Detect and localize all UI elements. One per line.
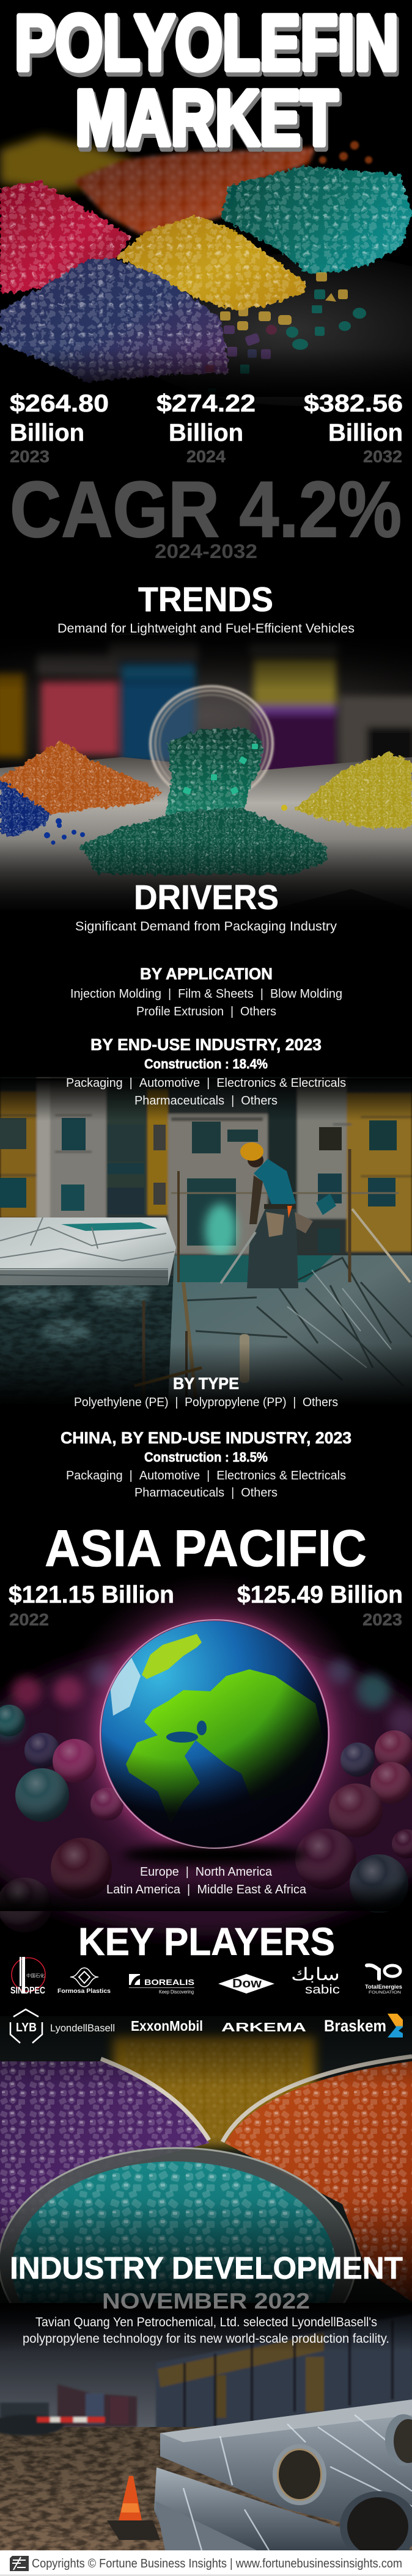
- segment: by end-use industry: Packaging | Automotive | Electronics & Electricals: [66, 1076, 346, 1090]
- worker head: [248, 1153, 263, 1167]
- segment: by end-use industry: BY END-USE INDUSTRY, 2023: [90, 1036, 322, 1054]
- lower roll end tube: [340, 2491, 412, 2562]
- stat: 2023 value: $264.80: [10, 390, 109, 417]
- pale post: [240, 1334, 249, 1383]
- Asia Pacific heading and values: [9, 1520, 403, 1629]
- worker trousers: [247, 1206, 298, 1288]
- blurred background: [0, 635, 412, 769]
- stray yellow pellet: [281, 805, 287, 811]
- logo: Braskem: Braskem: [324, 2017, 386, 2035]
- image fades: [0, 635, 412, 690]
- logo: Sinopec: 中国石化: [26, 1973, 45, 1978]
- segment: by application: BY APPLICATION: [140, 965, 273, 983]
- yellow bowl pellets: [125, 2042, 303, 2143]
- glass jar: [150, 686, 273, 801]
- broom handle: [221, 1232, 256, 1283]
- logo: Sabic: سابك: [291, 1964, 340, 1984]
- Night side: [98, 1618, 330, 1850]
- ground ruts: [0, 2427, 412, 2552]
- hanging bucket: [316, 1194, 336, 1215]
- trends heading: TRENDS: [138, 580, 273, 619]
- windows: [0, 1118, 397, 1253]
- segment: by end-use industry: Pharmaceuticals | Others: [134, 1094, 278, 1108]
- logo: LyondellBasell: LYB: [16, 2021, 37, 2034]
- tarp on the right: [168, 1255, 412, 1404]
- yellow pile: [294, 752, 412, 828]
- blurred spheres: [0, 1660, 412, 1740]
- lower wall: [0, 1276, 177, 1404]
- Asia Pacific heading and values: ASIA PACIFIC: [45, 1520, 367, 1578]
- stat: 2032 value: $382.56: [304, 390, 403, 417]
- teal bowl: [0, 2148, 356, 2376]
- Eurasia and Africa: [126, 1669, 324, 1824]
- distant buildings: [0, 2384, 137, 2427]
- Asia Pacific heading and values: 2022: [9, 1610, 49, 1629]
- industry development heading: INDUSTRY DEVELOPMENT: [10, 2251, 403, 2285]
- shadow under globe: [123, 1844, 306, 1866]
- dark mound: [0, 2415, 64, 2436]
- drivers heading: [75, 878, 337, 934]
- fade at the top: [0, 2016, 412, 2088]
- Asia Pacific heading and values: 2023: [362, 1610, 402, 1629]
- logo: Sinopec: SINOPEC: [10, 1986, 45, 1996]
- worker shirt: [254, 1159, 296, 1209]
- top and bottom fades: [0, 1881, 412, 1911]
- stat: 2032 value: 2032: [363, 447, 402, 466]
- bottom darkening: [0, 348, 412, 397]
- title: [15, 0, 400, 165]
- northern landmass: [142, 1634, 202, 1679]
- steam: [205, 1203, 237, 1257]
- focused spheres: [0, 1705, 412, 1932]
- stat: 2032 value: [304, 390, 403, 466]
- tarp folds: [183, 1258, 412, 1386]
- segment: by application: [70, 965, 342, 1018]
- green heap on table: [79, 807, 328, 874]
- lighter tarp highlights: [287, 1270, 391, 1368]
- tool belt: [264, 1204, 313, 1237]
- logo: LyondellBasell: [10, 2009, 115, 2043]
- title: MARKET: [77, 78, 340, 165]
- wall stains: [0, 1276, 177, 1404]
- rolls wrapped in plastic: [154, 2400, 412, 2562]
- industry development text: [23, 2315, 389, 2346]
- Asia Pacific heading and values: $121.15 Billion: [9, 1581, 174, 1608]
- ocean: [98, 1618, 330, 1850]
- scattered pellets: [183, 272, 366, 394]
- footer logo: [10, 2556, 29, 2571]
- bright green pellets: [183, 744, 258, 795]
- top fade: [0, 2303, 412, 2352]
- drivers heading: Significant Demand from Packaging Industry: [75, 920, 337, 934]
- Inland seas: [166, 1721, 207, 1743]
- trends heading: [57, 580, 355, 636]
- scaffolding: [134, 1149, 410, 1398]
- black band under the trends image: [0, 910, 412, 1078]
- orange pile: [0, 741, 163, 815]
- footer: [0, 2550, 412, 2576]
- wall patches: [0, 1281, 153, 1343]
- logo: Sabic: sabic: [305, 1983, 340, 1997]
- segment: by application: Injection Molding | Film & Sheets | Blow Molding: [70, 987, 342, 1001]
- key players heading: KEY PLAYERS: [78, 1920, 335, 1964]
- segment: China by end-use industry: CHINA, BY END-USE INDUSTRY, 2023: [61, 1429, 351, 1447]
- logo: Dow: [218, 1974, 274, 1994]
- worker helmet: [240, 1142, 263, 1161]
- industry development heading: [10, 2251, 403, 2313]
- blurred far yellow pile: [0, 136, 131, 190]
- segment: by application: Profile Extrusion | Others: [136, 1005, 276, 1018]
- drivers heading: DRIVERS: [134, 878, 279, 917]
- lower roll: [154, 2467, 412, 2550]
- segment: by type: BY TYPE: [173, 1374, 239, 1393]
- segment: by end-use industry: Construction : 18.4%: [144, 1056, 268, 1072]
- industry development text: Tavian Quang Yen Petrochemical, Ltd. selected LyondellBasell's: [35, 2315, 377, 2329]
- segment: by type: Polyethylene (PE) | Polypropylene (PP) | Others: [74, 1396, 338, 1409]
- yellow pile: [116, 216, 306, 311]
- CAGR figure: 2024-2032: [155, 540, 257, 562]
- stat: 2023 value: [10, 390, 109, 466]
- logo: Arkema: ARKEMA: [221, 2021, 306, 2034]
- stat: 2024 value: 2024: [186, 447, 226, 466]
- purple bowl: [0, 2059, 209, 2253]
- blurred jars: [0, 639, 412, 776]
- Asia Pacific heading and values: $125.49 Billion: [237, 1581, 403, 1608]
- logo: TotalEnergies Foundation: FOUNDATION: [369, 1991, 401, 1995]
- ground: [0, 2427, 412, 2552]
- industry development heading: NOVEMBER 2022: [102, 2288, 310, 2313]
- stat: 2024 value: [156, 390, 256, 466]
- globe scene with spheres: [0, 1572, 412, 1936]
- roll end tube: [273, 2444, 326, 2505]
- logo: Braskem: [324, 2014, 403, 2037]
- logo: Dow: Dow: [232, 1977, 262, 1990]
- wrap highlights: [183, 2415, 412, 2550]
- purple backdrop: [0, 1642, 412, 1936]
- stat: 2024 value: $274.22: [156, 390, 256, 417]
- worker: [221, 1142, 336, 1288]
- segment: China by end-use industry: Construction : 18.5%: [144, 1449, 268, 1465]
- title: MARKET: [75, 74, 338, 162]
- other regions: [106, 1865, 307, 1896]
- blue pile: [0, 779, 51, 836]
- logo: Formosa Plastics: [57, 1968, 111, 1995]
- blurred distant pellets: [319, 141, 372, 164]
- dark fade behind heading: [0, 2198, 412, 2303]
- building facade: [0, 1078, 412, 1286]
- table: [0, 757, 412, 910]
- logo: LyondellBasell: LyondellBasell: [50, 2022, 115, 2034]
- right roll end tube: [385, 2414, 412, 2465]
- upper roll: [160, 2400, 412, 2540]
- other regions: Latin America | Middle East & Africa: [106, 1883, 307, 1896]
- construction site image with plastic rolls: [0, 2303, 412, 2562]
- red pile: [0, 181, 131, 294]
- logo: Sinopec: [10, 1957, 45, 1996]
- segment: China by end-use industry: [61, 1429, 351, 1500]
- trends image: jars and pellets: [0, 635, 412, 910]
- stat: 2023 value: 2023: [10, 447, 50, 466]
- logo: Borealis: Keep Discovering: [159, 1989, 194, 1995]
- purple and blue pile: [0, 259, 229, 382]
- stat: 2024 value: Billion: [169, 419, 243, 446]
- hero image: coloured polymer pellet piles: [0, 136, 412, 406]
- worker arm: [249, 1175, 263, 1224]
- teal pile: [221, 166, 412, 272]
- bottom roll: [155, 2501, 257, 2550]
- logo: Borealis: BOREALIS: [144, 1978, 194, 1987]
- orange bowl: [223, 2056, 412, 2302]
- stat: 2032 value: Billion: [328, 419, 403, 446]
- logo: TotalEnergies Foundation: TotalEnergies: [365, 1984, 402, 1990]
- logo: Borealis: [129, 1974, 194, 1995]
- sky: [0, 2303, 412, 2431]
- red barrier: [37, 2417, 105, 2423]
- floor: [116, 253, 412, 406]
- blurred yellow bowl: [113, 2036, 315, 2146]
- green pellets spilling from jar: [165, 728, 263, 815]
- other regions: Europe | North America: [140, 1865, 273, 1879]
- segment: by type: [74, 1374, 338, 1409]
- industry development text: polypropylene technology for its new world-scale production facility.: [23, 2332, 389, 2346]
- segment: China by end-use industry: Packaging | Automotive | Electronics & Electricals: [66, 1469, 346, 1482]
- segment: by end-use industry: [66, 1036, 346, 1108]
- logo: Sabic: [291, 1964, 340, 1997]
- plastic sheet stack: [0, 1217, 176, 1285]
- trends heading: Demand for Lightweight and Fuel-Efficient Vehicles: [57, 622, 355, 636]
- construction image: worker with plastic sheets: [0, 1078, 412, 1406]
- stat: 2023 value: Billion: [10, 419, 84, 446]
- blurred orange pile: [73, 147, 315, 234]
- blue scattered pellets: [44, 818, 85, 845]
- pellet bowls image: [0, 2016, 412, 2376]
- traffic cone: [107, 2476, 160, 2540]
- ice edge: [110, 1658, 141, 1716]
- top and bottom fades: [0, 1078, 412, 1121]
- logo: ExxonMobil: ExxonMobil: [131, 2018, 203, 2034]
- scaffold building: [156, 2314, 412, 2433]
- logo: Formosa Plastics: Formosa Plastics: [57, 1988, 111, 1995]
- pink glow around globe: [53, 1572, 377, 1896]
- logo: TotalEnergies Foundation: [365, 1965, 402, 1995]
- globe: [98, 1618, 330, 1850]
- segment: China by end-use industry: Pharmaceuticals | Others: [134, 1486, 278, 1500]
